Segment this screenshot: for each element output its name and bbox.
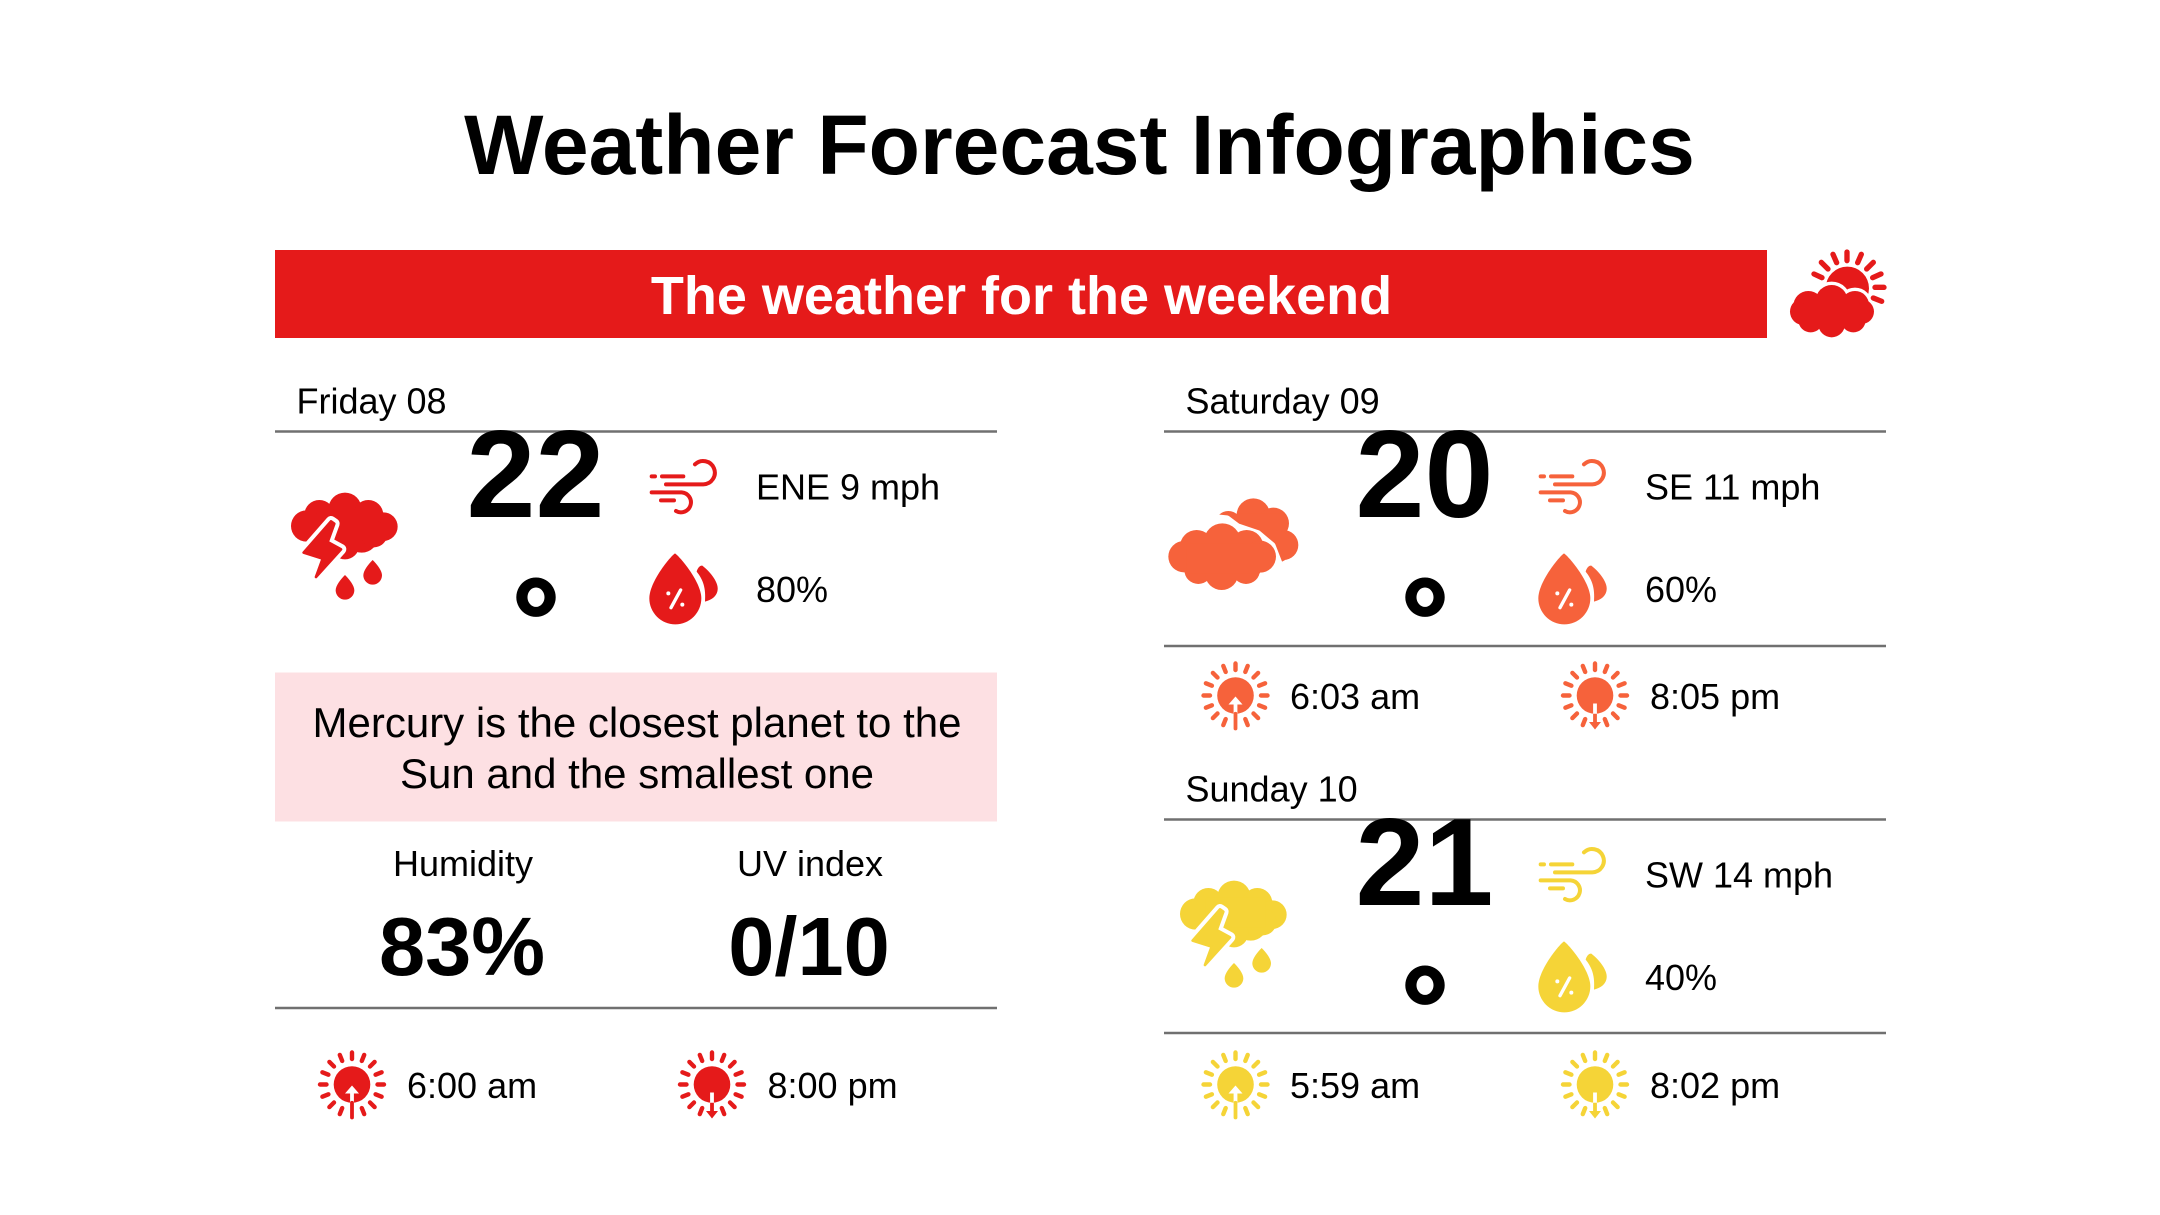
- panel: Sunday: 40%: [1645, 957, 1717, 998]
- Friday sunrise: 6:00 am: [407, 1065, 537, 1106]
- sunset: 8:05 pm: [1650, 676, 1780, 717]
- icon: thunderstorm: [1180, 881, 1287, 988]
- icon: wind: [1541, 849, 1604, 900]
- sunset: [1563, 1052, 1780, 1118]
- humidity stat: Humidity: [393, 843, 533, 884]
- callout: [275, 672, 997, 822]
- sunrise: [1204, 664, 1420, 728]
- temperature: 21: [1356, 794, 1493, 932]
- title: Weather Forecast Infographics: [464, 98, 1695, 192]
- banner heading: The weather for the weekend: [651, 266, 1392, 326]
- icon: humidity drop: [1538, 941, 1607, 1012]
- day label: Friday 08: [296, 380, 447, 422]
- callout: Sun and the smallest one: [400, 750, 874, 797]
- panel: Saturday: 60%: [1645, 569, 1717, 610]
- panel: Friday: [275, 380, 997, 624]
- Friday sunrise: [320, 1052, 537, 1118]
- banner: [275, 250, 1767, 338]
- temperature: 20: [1356, 406, 1493, 544]
- UV stat: [728, 843, 890, 993]
- sunset: [1563, 664, 1780, 730]
- icon: wind: [652, 461, 715, 512]
- degree ring: [1405, 578, 1445, 617]
- icon: humidity drop: [649, 553, 718, 624]
- rain value: 80%: [756, 569, 828, 610]
- icon: thunderstorm: [291, 493, 398, 600]
- Friday sunset: 8:00 pm: [768, 1065, 898, 1106]
- callout: Mercury is the closest planet to the: [313, 699, 961, 746]
- wind value: ENE 9 mph: [756, 466, 940, 508]
- degree ring: [516, 578, 556, 617]
- panel: Saturday: [1164, 380, 1886, 730]
- panel: Saturday: Saturday 09: [1186, 380, 1380, 422]
- sunrise: 5:59 am: [1290, 1065, 1420, 1106]
- icon: clouds: [1168, 498, 1298, 590]
- humidity stat: [379, 843, 545, 993]
- sunset: 8:02 pm: [1650, 1065, 1780, 1106]
- panel: Sunday: Sunday 10: [1186, 768, 1358, 810]
- temperature: 22: [467, 406, 604, 544]
- humidity stat: 83%: [379, 900, 545, 993]
- icon: sun behind cloud: [1790, 252, 1884, 337]
- sunrise: 6:03 am: [1290, 676, 1420, 717]
- icon: wind: [1541, 461, 1604, 512]
- sunrise: [1204, 1052, 1420, 1118]
- panel: Sunday: SW 14 mph: [1645, 854, 1833, 896]
- panel: Saturday: SE 11 mph: [1645, 466, 1820, 508]
- icon: humidity drop: [1538, 553, 1607, 624]
- panel: Sunday: [1164, 768, 1886, 1118]
- UV stat: UV index: [737, 843, 883, 884]
- UV stat: 0/10: [728, 900, 890, 993]
- Friday sunset: [680, 1052, 898, 1118]
- degree ring: [1405, 966, 1445, 1005]
